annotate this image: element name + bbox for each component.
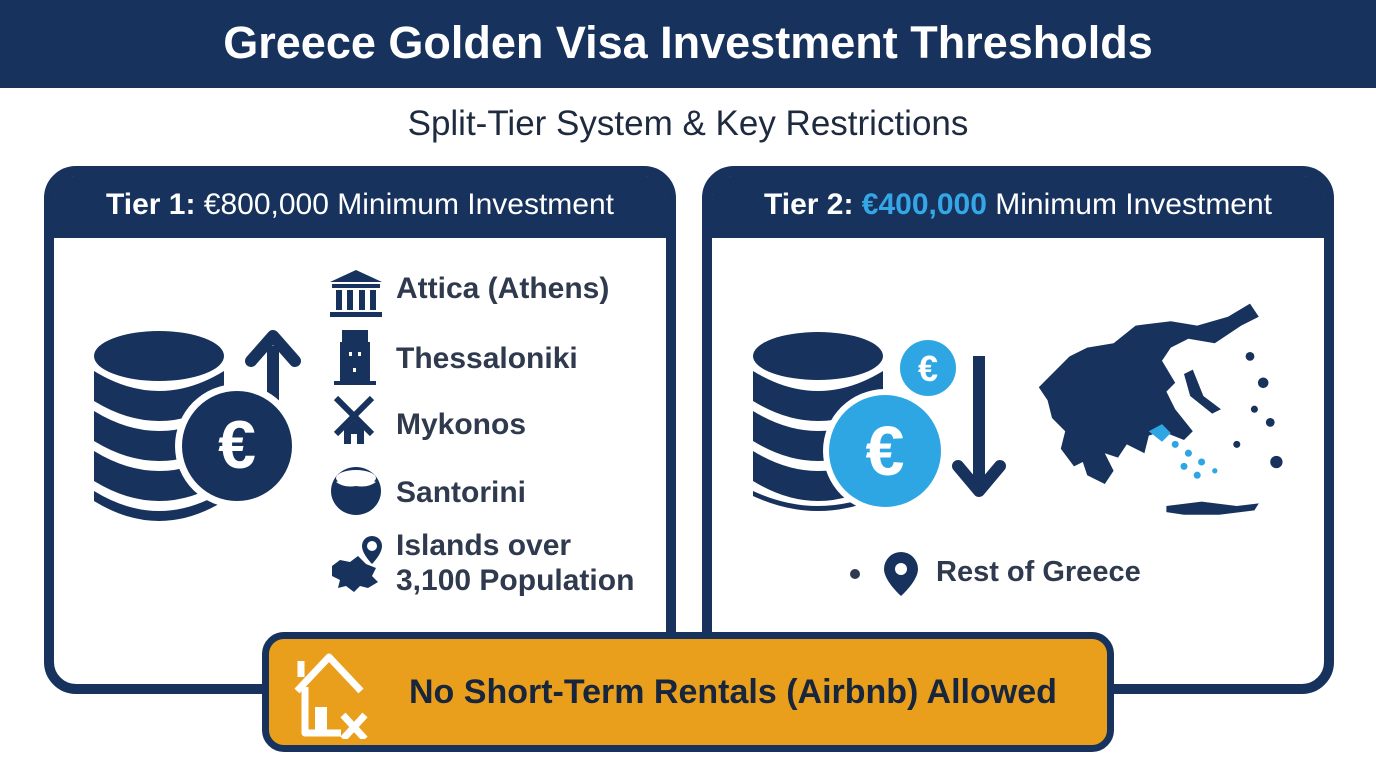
icon: house with x: [294, 654, 368, 739]
heading: tier 1: [54, 176, 666, 238]
text: banner message: No Short-Term Rentals (Airbnb) Allowed: [409, 673, 1057, 711]
map: Greece: [1038, 304, 1283, 515]
icon: coin stack with blue euros and down arrow: [753, 332, 1006, 511]
item: Attica: Attica (Athens): [396, 272, 609, 305]
heading: tier 1: Tier 1: €800,000 Minimum Investment: [106, 188, 614, 221]
list: tier 1 locations: [330, 270, 634, 597]
item: Santorini: Santorini: [396, 476, 526, 509]
item: islands over 3,100 population: [332, 529, 634, 597]
panel: tier 2: [702, 166, 1334, 694]
item: rest of Greece: [850, 552, 1141, 596]
item: rest of Greece: Rest of Greece: [936, 556, 1141, 588]
heading: tier 2: Tier 2: €400,000 Minimum Investment: [764, 188, 1272, 221]
icon: coin stack with euro and up arrow: €: [218, 407, 256, 483]
item: Santorini: [331, 467, 526, 515]
item: Mykonos: [334, 396, 526, 444]
item: islands over 3,100 population: Islands over: [396, 529, 571, 562]
item: Thessaloniki: [334, 330, 578, 385]
item: Thessaloniki: Thessaloniki: [396, 342, 578, 375]
icon: coin stack with blue euros and down arrow: €: [866, 412, 904, 490]
icon: coin stack with euro and up arrow: [94, 330, 301, 521]
heading: tier 2: [712, 176, 1324, 238]
item: Attica: [330, 270, 609, 317]
title: [0, 0, 1376, 88]
title: Greece Golden Visa Investment Thresholds: [223, 17, 1153, 68]
item: islands over 3,100 population: 3,100 Population: [396, 564, 634, 597]
item: Mykonos: Mykonos: [396, 408, 526, 441]
banner: no short-term rentals: [262, 632, 1114, 752]
panel: tier 1: [44, 166, 676, 694]
subtitle: Split-Tier System & Key Restrictions: [408, 104, 968, 143]
icon: coin stack with blue euros and down arrow: €: [918, 348, 938, 389]
